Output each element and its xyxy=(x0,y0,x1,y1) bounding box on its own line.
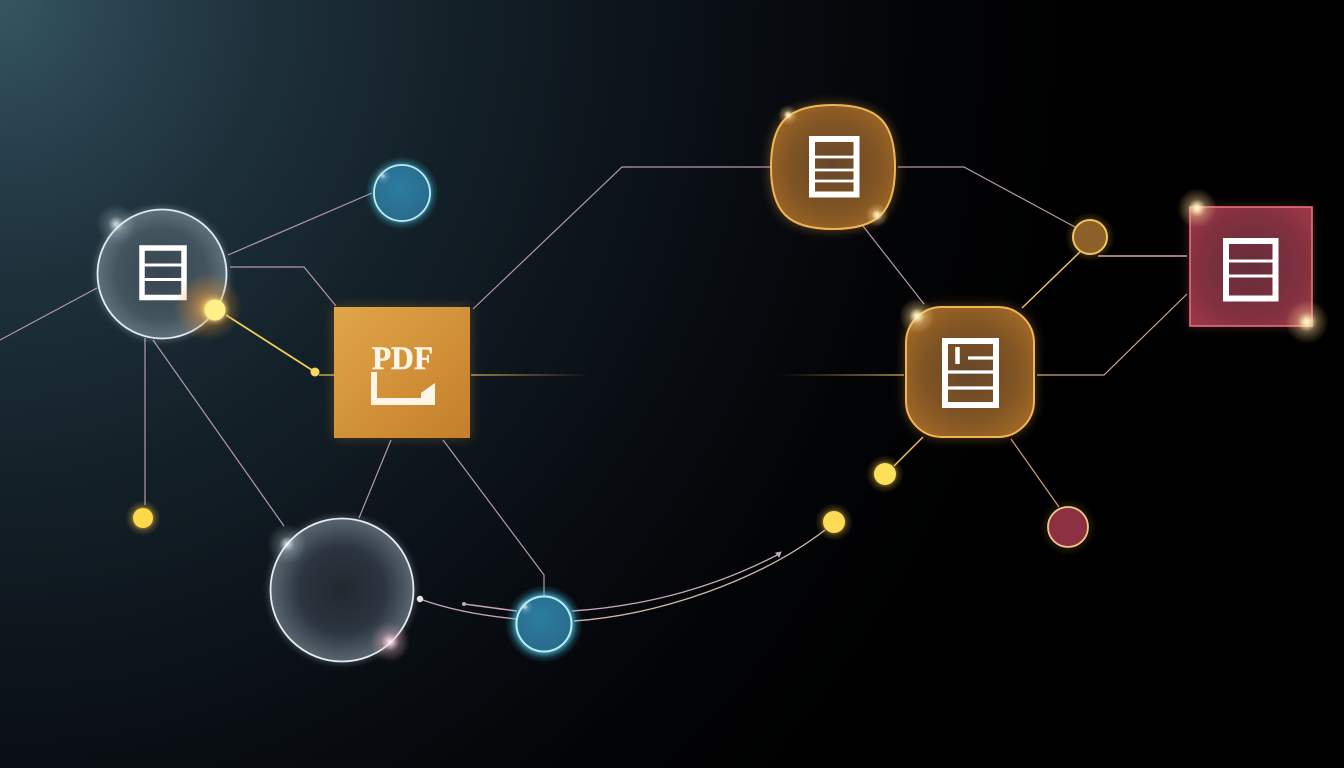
node: large glass circle xyxy=(267,518,414,662)
icon: document with header xyxy=(945,341,996,405)
icon: document rows xyxy=(812,139,856,194)
yellow dot on curve end xyxy=(815,503,853,541)
glowing yellow junction dot xyxy=(174,273,242,341)
yellow dot lower left xyxy=(125,500,161,536)
node: small blue circle top xyxy=(365,156,439,230)
node: amber rounded tile middle xyxy=(899,298,1034,437)
node: PDF tile xyxy=(334,307,470,438)
curved arrows through lower blue node xyxy=(417,530,825,621)
node: small crimson circle xyxy=(1039,498,1097,556)
node: crimson square xyxy=(1177,188,1329,344)
icon: table rows xyxy=(1226,241,1276,298)
yellow dot below middle tile xyxy=(866,455,904,493)
node: amber rounded tile top xyxy=(771,105,895,229)
small yellow connector dot xyxy=(310,368,320,376)
node: small amber circle xyxy=(1065,212,1115,262)
icon: download tray xyxy=(371,372,435,405)
connector lines xyxy=(0,167,1187,597)
label: PDF: PDF xyxy=(372,341,433,377)
node: blue circle bottom xyxy=(505,585,583,663)
icon: table document xyxy=(142,248,184,298)
node: glass circle top left xyxy=(96,204,227,339)
